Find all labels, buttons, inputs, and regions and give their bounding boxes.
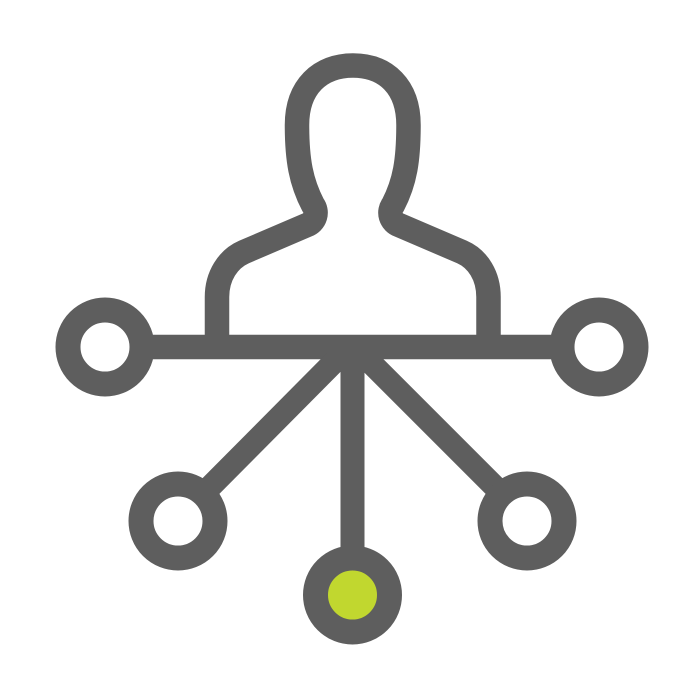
node: right: [562, 310, 636, 384]
node: lower left: [141, 484, 215, 558]
diagonal connector right: [358, 350, 500, 492]
diagonal connector left: [205, 350, 346, 492]
person outline: [217, 66, 488, 346]
vertical connector: [340, 347, 364, 560]
node: left: [68, 310, 142, 384]
node: bottom green: [316, 558, 390, 632]
node: lower right: [490, 484, 564, 558]
horizontal connector line: [140, 335, 565, 359]
